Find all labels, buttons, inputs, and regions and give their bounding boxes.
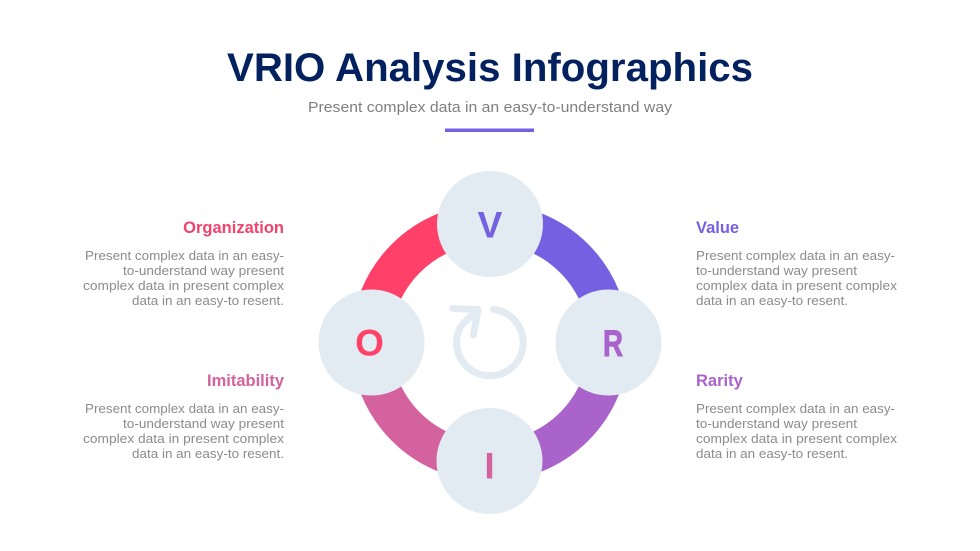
node O: O <box>355 322 384 364</box>
body: imitability <box>83 401 285 461</box>
icon: cycle arrow <box>453 308 523 376</box>
ring diagram <box>318 171 662 514</box>
text block: rarity <box>696 372 898 461</box>
heading: imitability: Imitability <box>207 372 285 390</box>
node I: I <box>484 446 495 486</box>
heading: rarity: Rarity <box>696 372 744 390</box>
node V <box>437 171 543 277</box>
body: organization: to-understand way present <box>123 263 284 278</box>
body: organization: complex data in present complex <box>83 278 285 293</box>
body: rarity: to-understand way present <box>696 416 857 431</box>
node R <box>556 290 662 396</box>
node R: R <box>603 323 623 364</box>
ring segment: value <box>490 224 609 342</box>
body: rarity: data in an easy-to resent. <box>696 446 848 461</box>
body: organization: data in an easy-to resent. <box>132 293 284 308</box>
ring segment: imitability <box>371 342 490 462</box>
body: rarity <box>696 401 898 461</box>
heading: organization: Organization <box>183 219 284 237</box>
text block: organization <box>83 219 285 308</box>
heading: value: Value <box>696 219 739 237</box>
ring segment: rarity <box>490 342 609 462</box>
text block: value <box>696 219 898 308</box>
text block: imitability <box>83 372 285 461</box>
body: rarity: complex data in present complex <box>696 431 898 446</box>
node V: V <box>478 204 503 246</box>
body: imitability: Present complex data in an easy- <box>85 401 284 416</box>
body: value <box>696 248 898 308</box>
node O <box>318 290 424 396</box>
title: VRIO Analysis Infographics <box>227 46 753 90</box>
body: organization <box>83 248 285 308</box>
body: imitability: to-understand way present <box>123 416 284 431</box>
body: value: data in an easy-to resent. <box>696 293 848 308</box>
ring segment: organization <box>371 224 490 342</box>
body: rarity: Present complex data in an easy- <box>696 401 895 416</box>
node I <box>436 408 542 514</box>
body: value: to-understand way present <box>696 263 857 278</box>
body: organization: Present complex data in an easy- <box>85 248 284 263</box>
title underline <box>445 128 534 132</box>
body: imitability: complex data in present complex <box>83 431 285 446</box>
subtitle: Present complex data in an easy-to-understand way <box>308 99 673 116</box>
body: value: Present complex data in an easy- <box>696 248 895 263</box>
body: value: complex data in present complex <box>696 278 898 293</box>
body: imitability: data in an easy-to resent. <box>132 446 284 461</box>
